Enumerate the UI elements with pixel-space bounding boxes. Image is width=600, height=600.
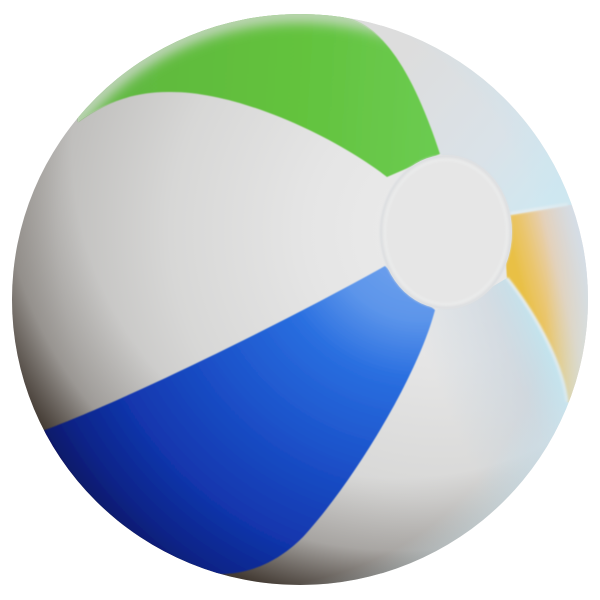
rim light (312, 205, 588, 584)
panel: white upper right (380, 25, 572, 212)
hub cap (380, 155, 512, 309)
bottom shadow (12, 151, 522, 585)
panel: green (77, 14, 440, 178)
panel: blue (44, 266, 436, 574)
orange panel group (506, 206, 588, 402)
panel: white lower right tint (442, 278, 568, 447)
orange seams (507, 204, 568, 402)
